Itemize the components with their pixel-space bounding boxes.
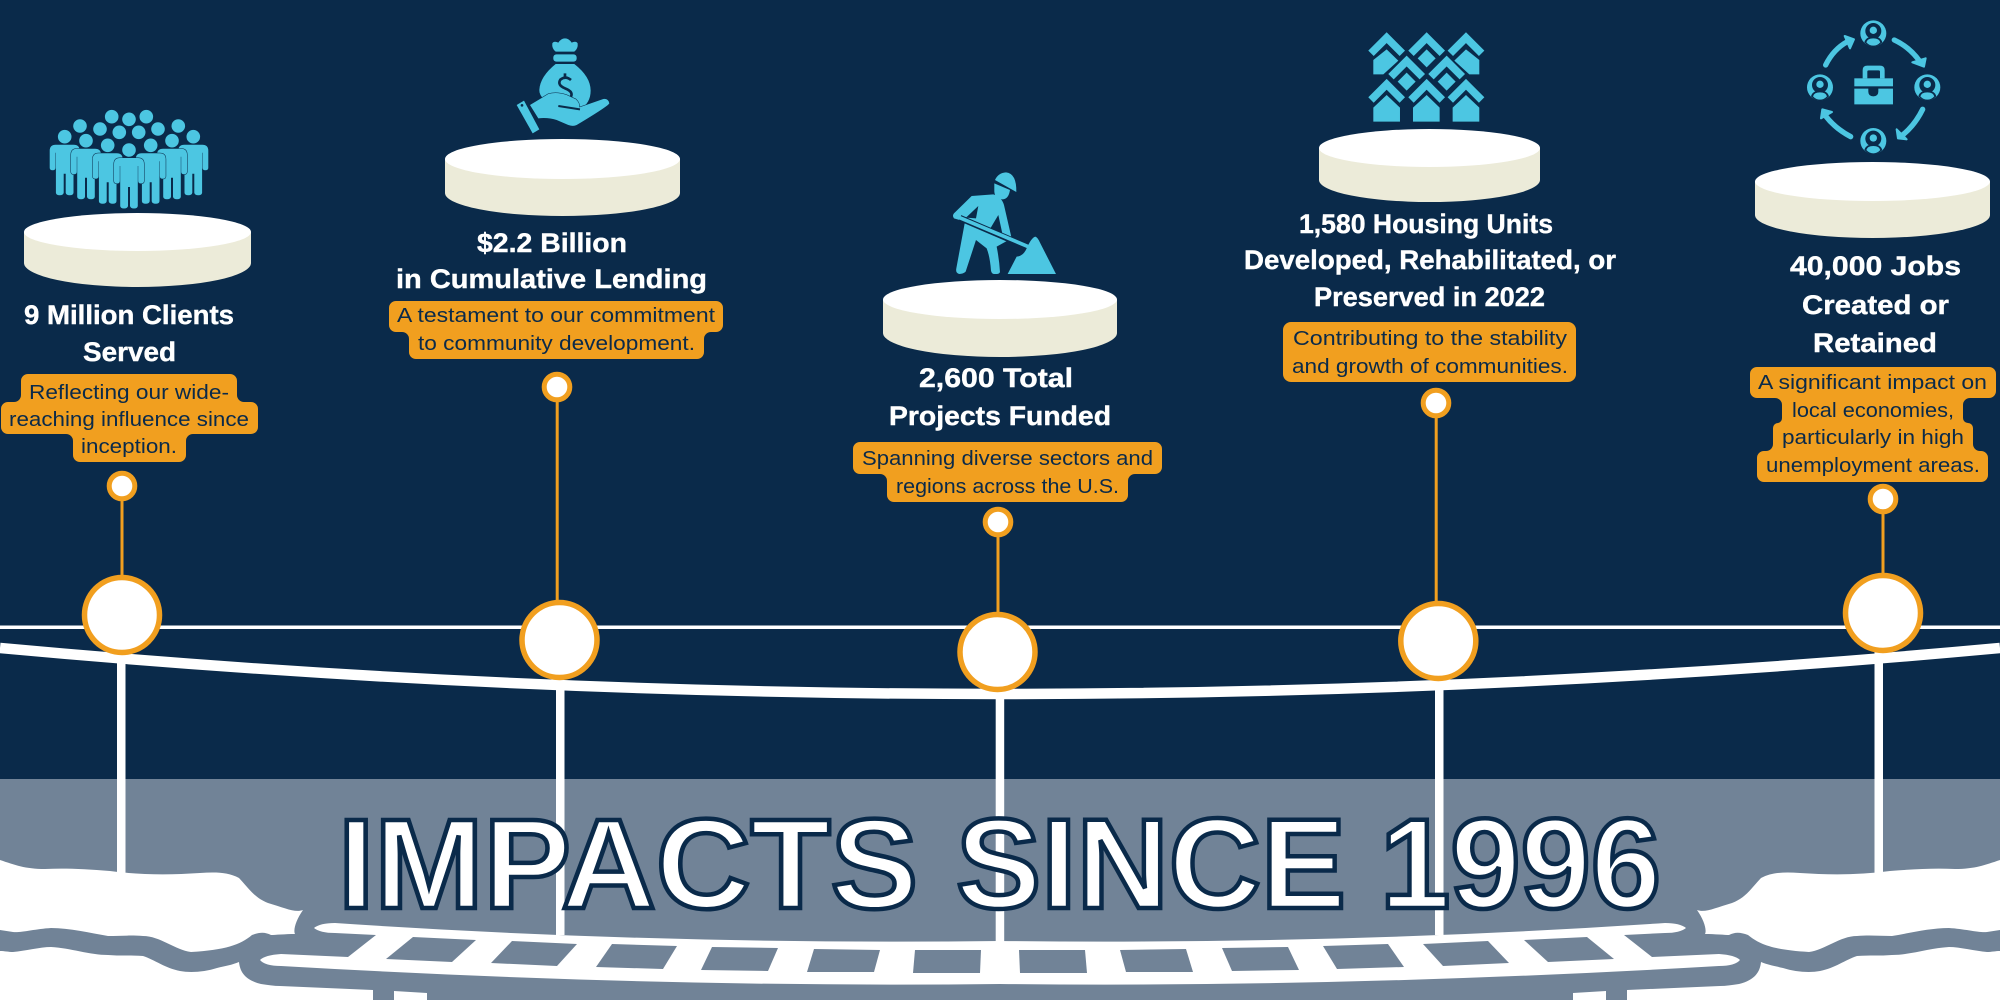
description callout: A testament to our commitment <box>397 304 715 327</box>
grey title band <box>0 779 2000 1000</box>
small node <box>109 473 135 499</box>
description callout: unemployment areas. <box>1766 454 1980 477</box>
description callout: reaching influence since <box>9 408 249 431</box>
heading <box>1790 251 1961 358</box>
vertical bridge suspenders <box>117 650 1883 945</box>
description callout: Spanning diverse sectors and <box>862 447 1153 470</box>
heading <box>1244 209 1617 312</box>
description callout <box>1283 322 1576 382</box>
heading: Retained <box>1813 328 1937 358</box>
heading: Preserved in 2022 <box>1314 282 1545 312</box>
heading: 40,000 Jobs <box>1790 251 1961 281</box>
description callout <box>1750 367 1996 482</box>
podium disc <box>883 280 1117 357</box>
right hand holding bridge <box>1573 860 2000 1000</box>
horizontal bridge line <box>0 626 2000 629</box>
description callout <box>1 374 258 462</box>
small node <box>1423 390 1449 416</box>
icon: job cycle with briefcase <box>1807 20 1940 154</box>
orange connector lines <box>120 395 1884 615</box>
description callout: A significant impact on <box>1758 371 1987 394</box>
description callout <box>389 301 723 359</box>
title: 1996 <box>1380 793 1661 936</box>
heading: Created or <box>1802 290 1950 320</box>
bridge deck <box>260 923 1740 985</box>
pillar 3: projects funded <box>853 172 1162 535</box>
small node <box>544 374 570 400</box>
title <box>338 793 1661 936</box>
heading: in Cumulative Lending <box>396 264 707 294</box>
podium disc <box>1319 129 1540 202</box>
bridge main cable <box>0 648 2000 694</box>
small node <box>1870 486 1896 512</box>
title: SINCE <box>956 793 1346 936</box>
pillar 1: clients served <box>1 110 258 499</box>
heading <box>24 300 234 367</box>
heading: $2.2 Billion <box>477 228 627 258</box>
podium disc <box>445 139 680 216</box>
description callout: local economies, <box>1792 399 1954 422</box>
heading: 9 Million Clients <box>24 300 234 330</box>
heading <box>396 228 707 294</box>
description callout: and growth of communities. <box>1292 355 1568 378</box>
heading: 1,580 Housing Units <box>1299 209 1553 239</box>
icon: cluster of houses <box>1371 38 1482 122</box>
pillar 4: housing units <box>1244 38 1617 416</box>
podium disc <box>1755 162 1990 238</box>
title: IMPACTS <box>338 793 918 936</box>
pillar 2: cumulative lending <box>389 38 723 400</box>
heading: Projects Funded <box>889 401 1111 431</box>
small node <box>985 509 1011 535</box>
description callout: Contributing to the stability <box>1293 327 1568 350</box>
left hand holding bridge <box>0 860 427 1000</box>
icon: crowd of people <box>50 110 208 208</box>
icon: construction worker with shovel <box>953 172 1056 274</box>
icon: money bag in hand <box>517 38 609 133</box>
description callout: inception. <box>81 435 177 458</box>
description callout: regions across the U.S. <box>896 475 1119 498</box>
description callout: to community development. <box>418 332 695 355</box>
podium disc <box>24 213 251 287</box>
heading: Developed, Rehabilitated, or <box>1244 245 1617 275</box>
heading <box>889 363 1111 431</box>
description callout: Reflecting our wide- <box>29 381 229 404</box>
large timeline nodes <box>84 576 1920 690</box>
heading: 2,600 Total <box>919 363 1073 393</box>
heading: Served <box>83 337 176 367</box>
description callout <box>853 442 1162 502</box>
description callout: particularly in high <box>1782 426 1964 449</box>
pillar 5: jobs created <box>1750 20 1996 512</box>
